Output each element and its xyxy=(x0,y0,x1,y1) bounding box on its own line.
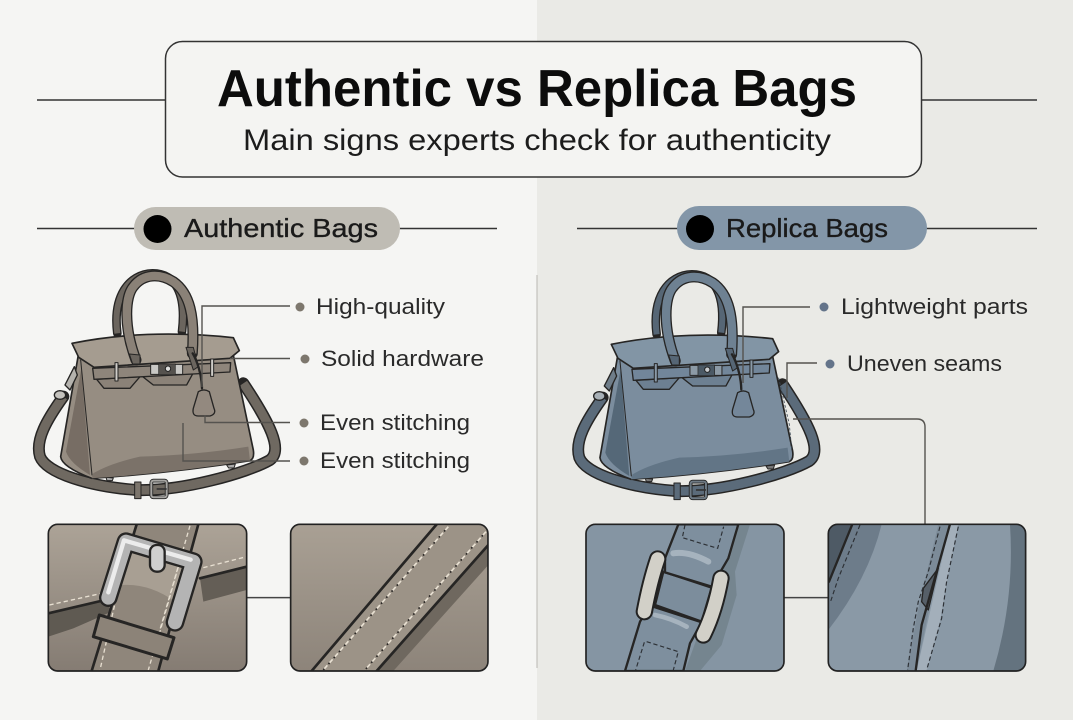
callout: uneven seams: Uneven seams xyxy=(847,351,1002,376)
callouts: replica xyxy=(820,294,1028,376)
callout: lightweight parts: Lightweight parts xyxy=(841,294,1028,319)
subtitle: Main signs experts check for authenticity xyxy=(243,124,831,157)
callouts: authentic xyxy=(296,294,484,473)
callout: high-quality: High-quality xyxy=(316,294,445,319)
leader lines: replica xyxy=(743,307,925,524)
illustration: authentic handbag xyxy=(39,273,275,499)
detail panels: authentic xyxy=(48,524,488,671)
section header: replica bags xyxy=(577,206,1037,250)
callout: solid hardware: Solid hardware xyxy=(321,346,484,371)
callout: even stitching: Even stitching xyxy=(320,410,470,435)
title panel xyxy=(37,42,1037,177)
section header: authentic bags xyxy=(37,207,497,250)
heading: Authentic vs Replica Bags xyxy=(217,60,857,118)
section header: authentic bags: Authentic Bags xyxy=(184,213,378,243)
panel: replica slider close-up xyxy=(586,524,784,671)
callout: even stitching second: Even stitching xyxy=(320,448,470,473)
leader lines: authentic xyxy=(183,306,290,461)
section header: replica bags: Replica Bags xyxy=(726,213,888,243)
panel: replica uneven seam close-up xyxy=(828,524,1026,671)
panel: authentic even stitching close-up xyxy=(291,524,488,671)
illustration: replica handbag xyxy=(578,274,815,500)
panel: authentic buckle close-up xyxy=(48,524,247,671)
detail panels: replica xyxy=(586,524,1026,671)
